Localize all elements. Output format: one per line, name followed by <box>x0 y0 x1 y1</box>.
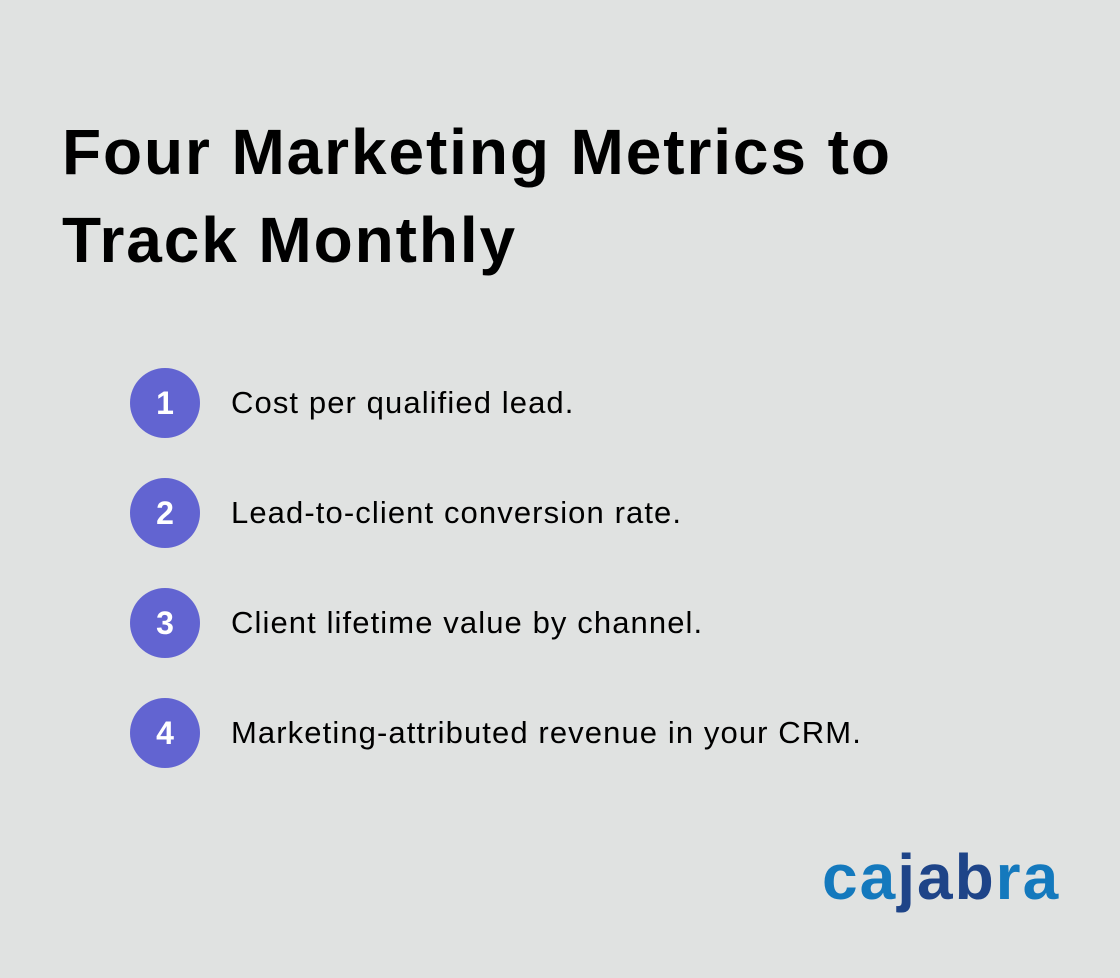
item 4: 4 <box>156 715 174 751</box>
item 4: Marketing-attributed revenue in your CRM. <box>231 715 862 750</box>
item 3: Client lifetime value by channel. <box>231 605 703 640</box>
item 2 <box>130 478 682 548</box>
item 2: Lead-to-client conversion rate. <box>231 495 682 530</box>
item 3: 3 <box>156 605 174 641</box>
title: Track Monthly <box>62 204 517 276</box>
item 1: 1 <box>156 385 174 421</box>
title: Four Marketing Metrics to <box>62 116 892 188</box>
item 2: 2 <box>156 495 174 531</box>
logo: cajabra <box>822 841 1060 913</box>
item 1: Cost per qualified lead. <box>231 385 574 420</box>
title <box>62 116 892 276</box>
item 4 <box>130 698 862 768</box>
item 1 <box>130 368 574 438</box>
item 3 <box>130 588 703 658</box>
